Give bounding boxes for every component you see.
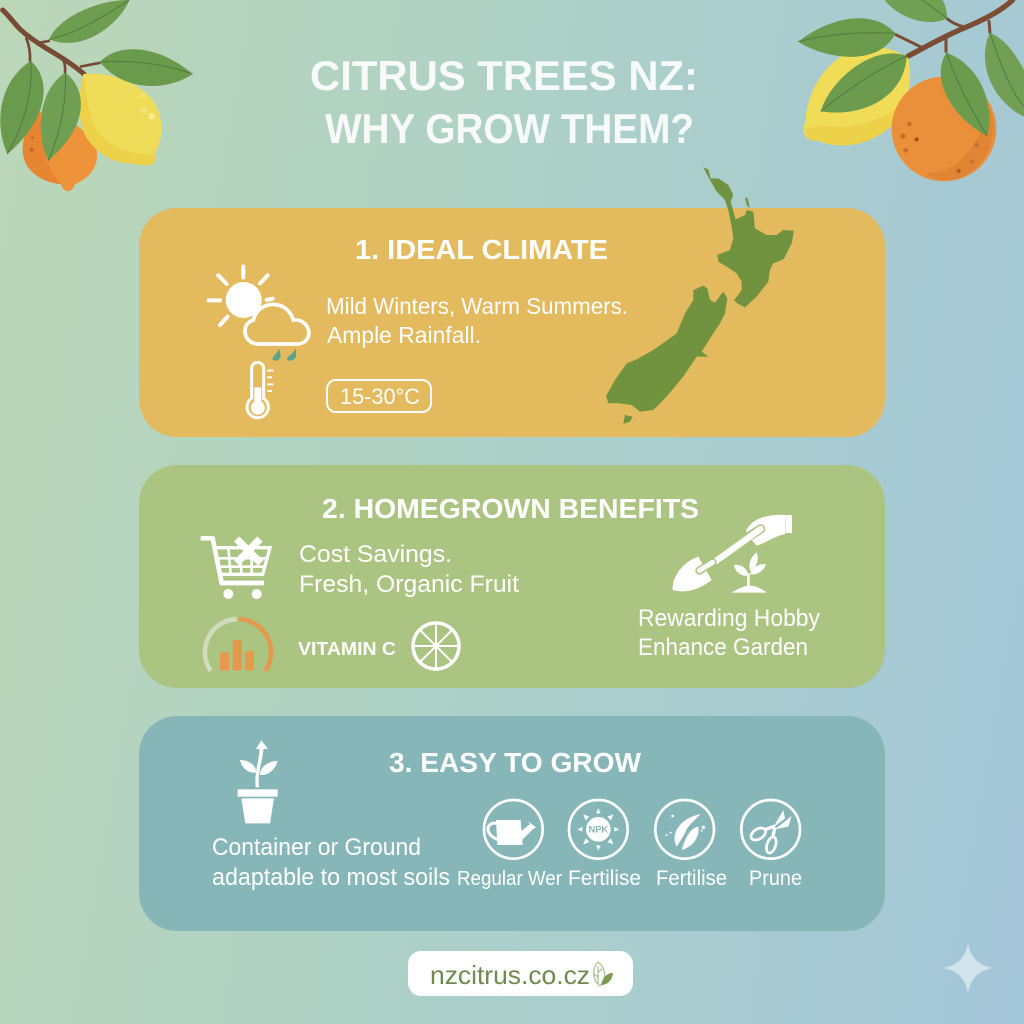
badge: temperature range [327,380,431,412]
text: hobby and garden: Enhance Garden [638,634,808,661]
text: container or ground: Container or Ground [212,834,421,861]
panel: easy to grow [139,716,885,931]
icon: NPK fertiliser: NPK [588,825,608,835]
labels: care tasks: Fertilise [568,867,641,890]
map: New Zealand [606,167,794,424]
footer: website badge [408,951,633,996]
labels: care tasks: Fertilise [656,867,727,890]
text: container or ground [212,834,450,891]
labels: care tasks: Prune [749,867,802,890]
title: CITRUS TREES NZ: [310,52,698,99]
title [310,52,698,152]
decoration: sparkle [943,943,993,993]
text: climate description: Mild Winters, Warm Summers. [326,293,628,319]
text: container or ground: adaptable to most soils [212,864,450,891]
icon: potted plant with arrow [238,740,278,823]
labels: care tasks: Regular Wer [457,867,562,890]
heading: homegrown benefits: 2. HOMEGROWN BENEFITS [322,493,699,524]
text: climate description [326,293,628,348]
title: WHY GROW THEM? [325,105,694,152]
panel: ideal climate [139,167,885,437]
labels: care tasks [457,867,802,890]
text: savings and fruit [299,541,519,598]
heading: easy to grow: 3. EASY TO GROW [389,747,642,778]
icon: hand with trowel and seedling [673,515,792,593]
icon: sun behind rain cloud [209,267,309,361]
text: hobby and garden [638,605,820,661]
icon: leaves [594,962,613,986]
icon: leaves fertilise [655,800,714,859]
icon: shopping cart with cross [201,538,270,599]
panel: homegrown benefits [139,465,885,688]
heading: ideal climate: 1. IDEAL CLIMATE [355,234,608,265]
icon: citrus slice [413,623,459,669]
text: savings and fruit: Cost Savings. [299,541,452,568]
badge: temperature range: 15-30°C [340,384,420,409]
text: climate description: Ample Rainfall. [327,322,481,348]
label: vitamin C: VITAMIN C [298,639,396,659]
illustration: lemon and orange branch, top right [798,0,1024,181]
text: hobby and garden: Rewarding Hobby [638,605,820,632]
illustration: lemon and orange branch, top left [0,0,193,191]
footer: website badge: nzcitrus.co.cz [430,960,590,990]
icon: NPK fertiliser [569,800,628,859]
icon: thermometer [247,362,273,418]
chart: vitamin C gauge [205,619,271,671]
icon: watering can [484,800,543,859]
icon: pruning shears [741,800,800,859]
text: savings and fruit: Fresh, Organic Fruit [299,571,519,598]
